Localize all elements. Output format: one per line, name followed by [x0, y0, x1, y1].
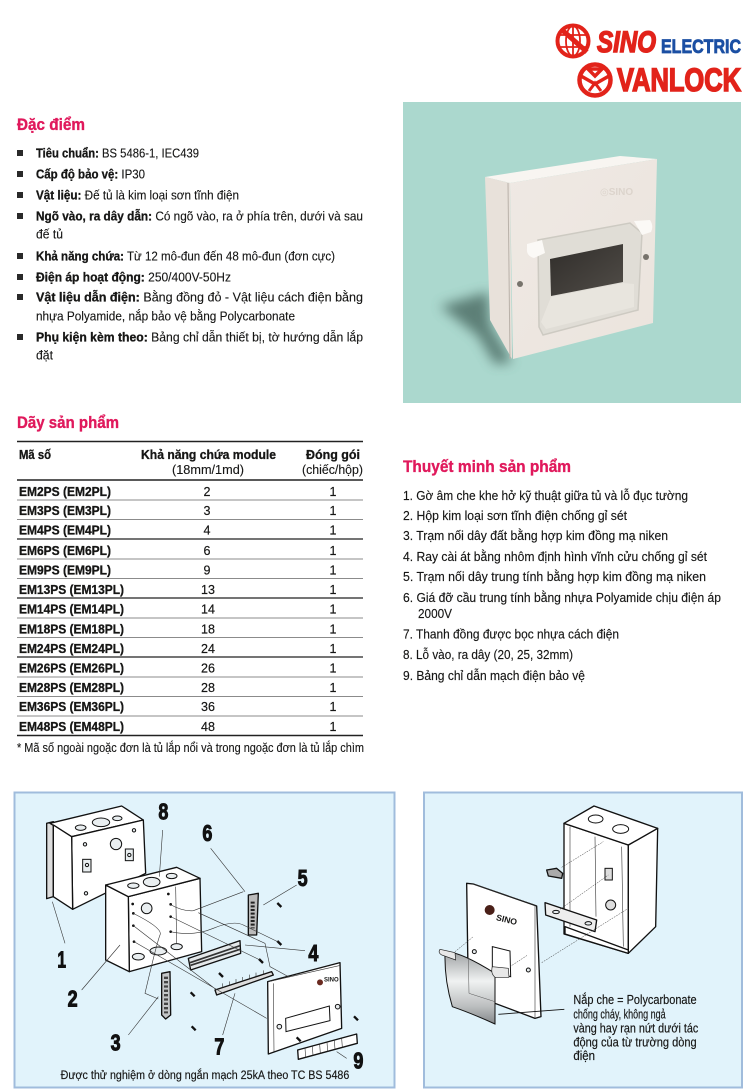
table rows: EM9PS (EM9PL)	[19, 564, 111, 578]
table rows: 1	[330, 544, 337, 558]
rear enclosure	[47, 806, 146, 909]
table header: Khả năng chứa module	[141, 448, 276, 462]
guide lines	[455, 842, 628, 967]
heading: Thuyết minh sản phẩm	[403, 457, 571, 476]
numbered legend: 5. Trạm nối dây trung tính bằng hợp kim đồng mạ niken	[403, 569, 706, 584]
table rows: EM18PS (EM18PL)	[19, 622, 124, 636]
table rows: 28	[201, 681, 215, 695]
logo: SINO Electric and Vanlock	[558, 26, 741, 98]
table rows: 1	[330, 662, 337, 676]
table rows: 1	[330, 681, 337, 695]
part numbers: 5	[298, 865, 308, 891]
table header: (18mm/1md)	[172, 463, 244, 477]
callout text: động của từ trường dòng	[573, 1036, 697, 1050]
section: Thuyết minh sản phẩm	[403, 457, 721, 683]
icon: SINO globe	[558, 26, 588, 56]
table rows: 24	[201, 642, 215, 656]
numbered legend: 2000V	[418, 607, 453, 621]
callout text: điện	[573, 1049, 595, 1063]
table rows: 1	[330, 720, 337, 734]
table rows: EM4PS (EM4PL)	[19, 524, 111, 538]
table rows: 1	[330, 485, 337, 499]
front plate	[268, 963, 342, 1054]
callout arrow	[498, 1009, 564, 1014]
part numbers: 4	[308, 940, 319, 966]
feature list: Khả năng chứa: Từ 12 mô-đun đến 48 mô-đun (đơn cực)	[36, 250, 335, 264]
numbered legend: 4. Ray cài át bằng nhôm định hình vĩnh cửu chống gỉ sét	[403, 549, 708, 564]
table rows: 48	[201, 720, 215, 734]
table rows: EM14PS (EM14PL)	[19, 602, 124, 616]
feature list: Vật liệu dẫn điện: Bằng đồng đỏ - Vật liệu cách điện bằng	[36, 290, 363, 304]
hinge pins	[439, 949, 509, 977]
front plate: SINO	[495, 912, 518, 927]
part numbers: 1	[57, 946, 66, 972]
diagram caption: Được thử nghiệm ở dòng ngắn mạch 25kA theo TC BS 5486	[61, 1067, 349, 1082]
table header: (chiếc/hộp)	[302, 463, 363, 477]
feature list: Ngõ vào, ra dây dẫn: Có ngõ vào, ra ở phía trên, dưới và sau	[36, 208, 363, 224]
panel: exploded cabinet diagram	[14, 792, 394, 1088]
hinges	[527, 240, 545, 258]
table rows: EM24PS (EM24PL)	[19, 642, 124, 656]
enclosure	[564, 806, 658, 953]
table rows: 1	[330, 583, 337, 597]
part 9: label strip	[298, 1034, 357, 1059]
screws	[517, 281, 523, 287]
SINO wordmark: SINO	[597, 26, 656, 59]
part numbers: 6	[202, 820, 212, 846]
part numbers: 8	[158, 798, 168, 824]
table rows: 36	[201, 700, 215, 714]
polycarbonate cover	[445, 952, 495, 1024]
bullet markers	[17, 150, 23, 340]
product photo	[403, 102, 741, 403]
table rows: EM6PS (EM6PL)	[19, 544, 111, 558]
cover drawing	[439, 806, 698, 1063]
screws	[191, 903, 358, 1041]
feature list: Tiêu chuẩn: BS 5486-1, IEC439	[36, 146, 199, 160]
part numbers: 7	[214, 1033, 224, 1059]
part 7: copper bar	[215, 970, 273, 995]
part 4: DIN rail	[188, 941, 241, 970]
table rows: 4	[204, 524, 211, 538]
feature list: Điện áp hoạt động: 250/400V-50Hz	[36, 270, 231, 284]
feature list: đặt	[36, 348, 54, 362]
table header	[19, 448, 363, 477]
table rows: EM13PS (EM13PL)	[19, 583, 124, 597]
part 3: earth block	[162, 972, 171, 1019]
numbered legend: 8. Lỗ vào, ra dây (20, 25, 32mm)	[403, 647, 573, 662]
table rows: 1	[330, 602, 337, 616]
icon: Vanlock emblem	[580, 64, 610, 96]
table rows: EM48PS (EM48PL)	[19, 720, 124, 734]
table rows: 9	[204, 564, 211, 578]
numbered legend	[403, 488, 721, 683]
numbered legend: 7. Thanh đồng được bọc nhựa cách điện	[403, 628, 619, 642]
exploded drawing	[47, 798, 363, 1082]
front plate: SINO	[324, 978, 339, 984]
table rows: 1	[330, 642, 337, 656]
table rows	[19, 485, 337, 734]
feature list: Vật liệu: Đế tủ là kim loại sơn tĩnh điện	[36, 188, 239, 202]
transparent cover	[538, 223, 642, 335]
small block	[547, 868, 563, 878]
table rows: 18	[201, 622, 215, 636]
front plate	[467, 883, 541, 1018]
embossed logo: ◎SINO	[600, 187, 633, 198]
table rows: 1	[330, 504, 337, 518]
cabinet body	[485, 156, 657, 183]
table rows: 13	[201, 583, 215, 597]
part numbers: 3	[111, 1030, 121, 1056]
table rules	[17, 442, 363, 736]
part numbers: 9	[353, 1047, 363, 1073]
feature list: Phụ kiện kèm theo: Bảng chỉ dẫn thiết bị, tờ hướng dẫn lắp	[36, 330, 363, 344]
table rows: 14	[201, 602, 215, 616]
cabinet shadow	[440, 292, 512, 364]
table rows: 3	[204, 504, 211, 518]
table rows: EM26PS (EM26PL)	[19, 662, 124, 676]
callout text: vàng hay rạn nứt dưới tác	[573, 1021, 698, 1035]
part 5: neutral block	[248, 893, 258, 935]
table rows: EM28PS (EM28PL)	[19, 681, 124, 695]
table header: Đóng gói	[306, 448, 360, 462]
table rows: 1	[330, 622, 337, 636]
table rows: EM3PS (EM3PL)	[19, 504, 111, 518]
panel: cover diagram	[424, 792, 742, 1088]
feature list: Cấp độ bảo vệ: IP30	[36, 168, 145, 182]
numbered legend: 9. Bảng chỉ dẫn mạch điện bảo vệ	[403, 668, 585, 683]
table footnote: * Mã số ngoài ngoặc đơn là tủ lắp nổi và trong ngoặc đơn là tủ lắp chìm	[17, 740, 364, 755]
part numbers	[57, 798, 363, 1073]
callout text: chống cháy, không ngả	[573, 1007, 666, 1021]
table rows: 2	[204, 485, 211, 499]
heading: Dãy sản phẩm	[17, 413, 119, 432]
heading: Đặc điểm	[17, 115, 85, 134]
numbered legend: 3. Trạm nối dây đất bằng hợp kim đồng mạ niken	[403, 528, 668, 543]
feature list	[36, 146, 363, 362]
table rows: 1	[330, 700, 337, 714]
table rows: 1	[330, 564, 337, 578]
leader lines	[52, 830, 347, 1058]
part numbers: 2	[68, 986, 78, 1012]
table header: Mã số	[19, 448, 51, 462]
callout text: Nắp che = Polycarbonate	[573, 992, 697, 1007]
table rows: 26	[201, 662, 215, 676]
feature list: đế tủ	[36, 228, 63, 242]
feature list: nhựa Polyamide, nắp bảo vệ bằng Polycarbonate	[36, 308, 295, 324]
numbered legend: 6. Giá đỡ cầu trung tính bằng nhựa Polyamide chịu điện áp	[403, 590, 721, 605]
middle enclosure	[106, 867, 202, 972]
section: Dãy sản phẩm table	[17, 413, 364, 755]
table rows: 1	[330, 524, 337, 538]
DIN rail	[545, 903, 597, 932]
table rows: EM2PS (EM2PL)	[19, 485, 111, 499]
numbered legend: 2. Hộp kim loại sơn tĩnh điện chống gỉ sét	[403, 509, 628, 523]
table rows: 6	[204, 544, 211, 558]
numbered legend: 1. Gờ âm che khe hở kỹ thuật giữa tủ và lỗ đục tường	[403, 488, 688, 503]
table rows: EM36PS (EM36PL)	[19, 700, 124, 714]
callout text	[573, 992, 698, 1063]
section: Đặc điểm	[17, 115, 363, 362]
